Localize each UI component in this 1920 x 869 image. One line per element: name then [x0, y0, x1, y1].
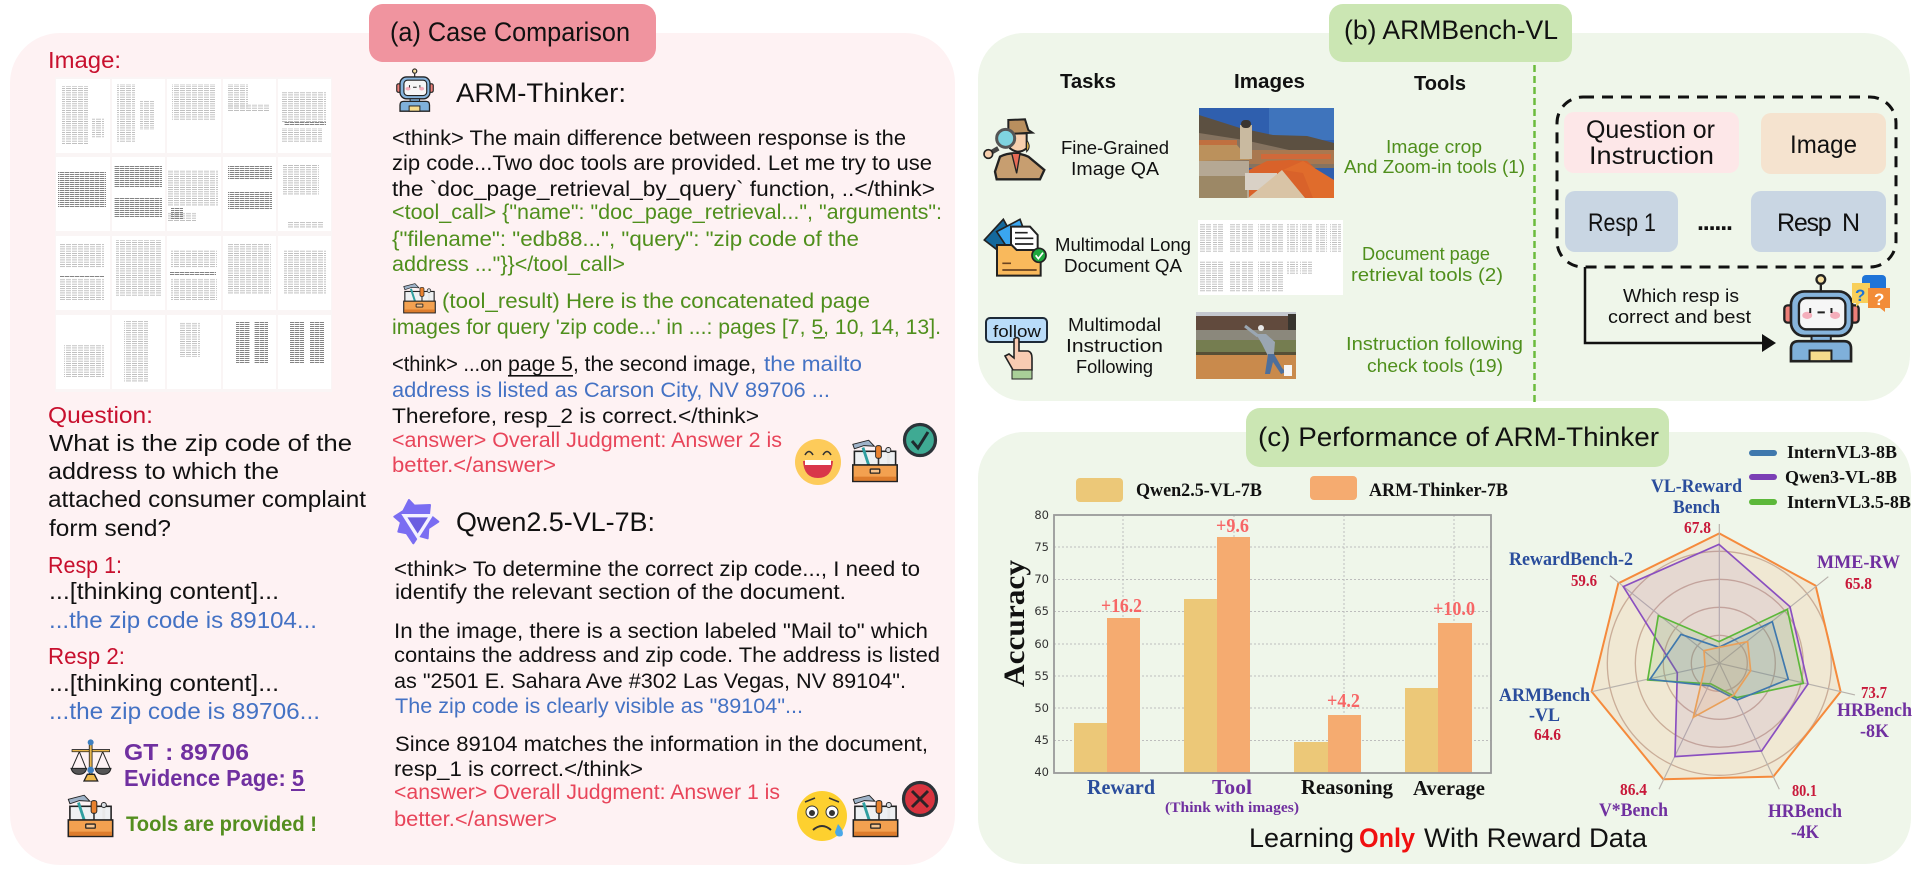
response 2: ...the zip code is 89706... — [49, 698, 320, 724]
reasoning about page 5 — [392, 353, 862, 428]
box: question or instruction: Question or — [1586, 116, 1715, 144]
heading: performance of ARM-Thinker: (c) Performance of ARM-Thinker — [1258, 422, 1659, 452]
box: response N — [1751, 191, 1886, 252]
icon: question bubbles: ? — [1874, 290, 1884, 309]
radar legend — [1752, 442, 1911, 512]
radar legend: Qwen3-VL-8B — [1785, 467, 1897, 487]
box: response 1: Resp 1 — [1588, 209, 1656, 237]
icon: toolbox — [853, 795, 898, 836]
radar axis labels: 59.6 — [1571, 571, 1597, 590]
panel: case comparison — [10, 4, 955, 865]
y axis tick labels: 55 — [1034, 669, 1049, 683]
radar axis labels — [1499, 476, 1912, 843]
arrow caption — [1608, 286, 1751, 327]
radar axis labels: -8K — [1860, 721, 1889, 742]
radar axis labels: RewardBench-2 — [1509, 549, 1633, 570]
correct answer text: better.</answer> — [392, 454, 556, 477]
task: fine-grained image QA: Image QA — [1071, 159, 1159, 179]
category labels: Reasoning — [1301, 775, 1393, 799]
series: InternVL3-8B — [1650, 622, 1788, 700]
improvement labels: +4.2 — [1327, 691, 1360, 712]
caption: learning only with reward data: With Reward Data — [1424, 823, 1648, 853]
icon: balance scales — [71, 739, 111, 781]
category labels: Tool — [1212, 775, 1252, 799]
radar axis labels: HRBench — [1837, 700, 1912, 721]
tool: instruction following check: check tools (19) — [1367, 356, 1503, 376]
series: inner baseline — [1693, 642, 1751, 717]
column heading: tools: Tools — [1414, 73, 1466, 95]
ARM-Thinker thinking text: the `doc_page_retrieval_by_query` function, ..</think> — [392, 178, 935, 201]
radar axis labels: ARMBench — [1499, 685, 1590, 706]
y axis tick labels: 75 — [1034, 540, 1049, 554]
y axis tick labels — [1034, 508, 1049, 779]
tool: document page retrieval: Document page — [1362, 244, 1490, 264]
tool: image crop and zoom: And Zoom-in tools (1) — [1344, 157, 1525, 177]
task: multimodal long document QA: Document QA — [1064, 256, 1182, 276]
question block — [48, 402, 367, 541]
column heading: tasks: Tasks — [1060, 71, 1116, 93]
tool result text: images for query 'zip code...' in ...: pages [7, 5, 10, 14, 13]. — [392, 316, 941, 339]
response 1 — [48, 552, 317, 633]
tool: document page retrieval — [1351, 244, 1503, 285]
reasoning about page 5: address is listed as Carson City, NV 89706 ... — [392, 379, 830, 402]
heading: case comparison: (a) Case Comparison — [390, 17, 630, 47]
tool call text: address ..."}}</tool_call> — [392, 253, 625, 276]
Qwen thinking text: <think> To determine the correct zip code..., I need to — [394, 558, 920, 581]
icon: cross badge — [904, 782, 936, 816]
response 1: ...the zip code is 89104... — [49, 607, 317, 633]
icon: question bubbles — [1852, 275, 1890, 312]
box: response 1 — [1565, 191, 1678, 252]
ellipsis: ...... — [1697, 208, 1733, 236]
tool result text: (tool_result) Here is the concatenated page — [442, 290, 870, 313]
wrong answer text: better.</answer> — [394, 808, 557, 831]
icon: follow button with hand: follow — [993, 322, 1042, 341]
reasoning about page 5: <think> ...on — [392, 353, 508, 376]
document page thumbnails — [55, 77, 332, 392]
question block: Question: — [48, 402, 153, 428]
tool: image crop and zoom — [1344, 137, 1525, 177]
tool result text — [392, 290, 941, 339]
tool call text — [392, 201, 942, 276]
y axis tick labels: 80 — [1034, 508, 1049, 522]
box: question or instruction — [1564, 112, 1739, 173]
caption: learning only with reward data: Learning — [1249, 823, 1354, 853]
Qwen heading: Qwen2.5-VL-7B: — [456, 507, 655, 537]
question block: form send? — [49, 515, 171, 541]
improvement labels: +10.0 — [1433, 599, 1475, 620]
reasoning about page 5: page 5 — [508, 353, 573, 376]
heading: case comparison — [369, 4, 656, 62]
radar axis labels: Bench — [1673, 497, 1720, 518]
response 1: Resp 1: — [48, 552, 122, 578]
task: multimodal instruction following: Following — [1076, 357, 1153, 377]
radar axis labels: 64.6 — [1534, 725, 1561, 744]
Qwen thinking text: contains the address and zip code. The address is listed — [394, 644, 940, 667]
ground truth: Evidence Page: 5 — [124, 765, 304, 791]
radar chart — [1499, 442, 1912, 843]
improvement labels: +16.2 — [1101, 596, 1142, 617]
heading: performance of ARM-Thinker — [1246, 408, 1669, 467]
y axis tick labels: 45 — [1034, 733, 1049, 747]
radar axis labels: V*Bench — [1599, 800, 1668, 821]
task: fine-grained image QA: Fine-Grained — [1061, 138, 1169, 158]
image label: Image: — [48, 47, 121, 73]
tool: image crop and zoom: Image crop — [1386, 137, 1482, 157]
task: multimodal instruction following: Multimodal — [1068, 315, 1161, 335]
radar legend: InternVL3-8B — [1787, 442, 1897, 462]
Qwen thinking text: Since 89104 matches the information in the document, — [395, 733, 928, 756]
icon: robot — [397, 69, 433, 111]
bar chart legend: ARM-Thinker-7B — [1369, 481, 1508, 501]
y axis tick labels: 40 — [1034, 765, 1049, 779]
task: fine-grained image QA — [1061, 138, 1169, 179]
tools provided note: Tools are provided ! — [126, 813, 317, 836]
radar axis labels: 65.8 — [1845, 574, 1872, 593]
icon: Qwen logo — [394, 500, 438, 543]
box: image — [1761, 113, 1886, 174]
category labels: Average — [1413, 776, 1485, 800]
ARM-Thinker thinking text — [392, 127, 935, 201]
column heading: images: Images — [1234, 71, 1305, 93]
reasoning about page 5: , the second image, — [573, 353, 762, 376]
radar axis labels: MME-RW — [1817, 552, 1900, 573]
bar chart: accuracy — [998, 508, 1491, 816]
caption: learning only with reward data: Only — [1359, 823, 1415, 853]
icon: laughing face — [795, 439, 841, 485]
icon: follow button with hand — [986, 318, 1047, 379]
question block: address to which the — [48, 458, 279, 484]
tool call text: <tool_call> {"name": "doc_page_retrieval...", "arguments": — [392, 201, 942, 224]
category labels: Reward — [1087, 775, 1155, 799]
y axis tick labels: 50 — [1034, 701, 1049, 715]
icon: check badge — [904, 424, 936, 456]
tool: instruction following check: Instruction following — [1346, 334, 1523, 354]
caption: learning only with reward data — [1249, 823, 1648, 853]
improvement labels — [1101, 516, 1475, 712]
category labels: (Think with images) — [1165, 800, 1299, 816]
box: question or instruction: Instruction — [1589, 142, 1714, 170]
Qwen thinking text — [394, 558, 940, 781]
green dashed divider — [1533, 65, 1536, 402]
bars: Reward — [1074, 618, 1140, 773]
radar axis labels: 73.7 — [1861, 683, 1887, 702]
y axis tick labels: 65 — [1034, 604, 1049, 618]
task: multimodal instruction following — [1066, 315, 1163, 377]
panel: performance — [978, 408, 1912, 864]
bars: Tool — [1184, 537, 1250, 773]
arrow to robot — [1585, 267, 1776, 352]
box: response N: Resp N — [1777, 209, 1860, 237]
y axis tick labels: 60 — [1034, 637, 1049, 651]
icon: toolbox — [404, 284, 435, 313]
series: Qwen3-VL-8B — [1623, 544, 1808, 757]
correct answer text: <answer> Overall Judgment: Answer 2 is — [392, 429, 782, 452]
radar axis labels: VL-Reward — [1651, 476, 1742, 497]
Qwen thinking text: resp_1 is correct.</think> — [394, 758, 643, 781]
icon: toolbox — [68, 795, 113, 836]
wrong answer text — [394, 781, 780, 831]
input group: question, image, responses — [1557, 97, 1896, 267]
ground truth: GT : 89706 — [124, 739, 249, 765]
ARM-Thinker thinking text: zip code...Two doc tools are provided. Let me try to use — [392, 152, 932, 175]
arrow caption: correct and best — [1608, 307, 1751, 327]
radar axis labels: 67.8 — [1684, 518, 1711, 537]
tool: document page retrieval: retrieval tools (2) — [1351, 265, 1503, 285]
arrow caption: Which resp is — [1623, 286, 1739, 306]
radar axis labels: HRBench — [1768, 801, 1842, 822]
radar axis labels: 86.4 — [1620, 780, 1647, 799]
y axis tick labels: 70 — [1034, 572, 1049, 586]
icon: detective — [984, 119, 1044, 179]
photo: old town rooftops — [1199, 108, 1334, 198]
response 2: ...[thinking content]... — [49, 670, 279, 696]
heading: ARMBench-VL: (b) ARMBench-VL — [1344, 15, 1558, 45]
image: long document pages — [1198, 220, 1343, 295]
icon: document folder — [984, 219, 1046, 276]
Qwen thinking text: The zip code is clearly visible as "89104"... — [395, 695, 803, 718]
heading: ARMBench-VL — [1329, 4, 1572, 62]
y axis title: Accuracy — [998, 560, 1031, 687]
tool: instruction following check — [1346, 334, 1523, 376]
radar legend: InternVL3.5-8B — [1787, 492, 1911, 512]
photo: man throwing on a field — [1196, 312, 1296, 379]
bar chart legend — [1076, 476, 1508, 502]
Qwen thinking text: as "2501 E. Sahara Ave #302 Las Vegas, NV 89104". — [394, 670, 906, 693]
icon: question bubbles: ? — [1855, 286, 1865, 305]
series: InternVL3.5-8B — [1648, 609, 1803, 698]
panel: ARMBench-VL — [978, 4, 1910, 402]
tool call text: {"filename": "edb88...", "query": "zip code of the — [392, 228, 859, 251]
task: multimodal long document QA — [1055, 235, 1191, 276]
radar axis labels: -VL — [1529, 705, 1560, 726]
radar axis labels: -4K — [1791, 822, 1819, 843]
reasoning about page 5: the mailto — [764, 353, 862, 376]
question block: attached consumer complaint — [48, 486, 367, 512]
ground truth — [124, 739, 305, 791]
task: multimodal long document QA: Multimodal Long — [1055, 235, 1191, 255]
response 2: Resp 2: — [48, 643, 125, 669]
improvement labels: +9.6 — [1216, 516, 1249, 537]
reasoning about page 5: Therefore, resp_2 is correct.</think> — [392, 405, 759, 428]
question block: What is the zip code of the — [49, 430, 352, 456]
box: image: Image — [1790, 131, 1857, 159]
task: multimodal instruction following: Instruction — [1066, 336, 1163, 356]
wrong answer text: <answer> Overall Judgment: Answer 1 is — [394, 781, 780, 804]
correct answer text — [392, 429, 782, 477]
response 1: ...[thinking content]... — [49, 578, 279, 604]
bar chart legend: Qwen2.5-VL-7B — [1136, 481, 1262, 501]
bars: Average — [1405, 623, 1472, 773]
icon: robot judge — [1784, 275, 1859, 361]
response 2 — [48, 643, 320, 724]
Qwen thinking text: In the image, there is a section labeled "Mail to" which — [394, 620, 928, 643]
Qwen thinking text: identify the relevant section of the document. — [395, 581, 846, 604]
icon: toolbox — [853, 440, 897, 481]
ARM-Thinker heading: ARM-Thinker: — [456, 78, 626, 108]
icon: crying face — [797, 791, 847, 841]
bars: Reasoning — [1294, 715, 1361, 773]
series: ARM-Thinker — [1592, 533, 1841, 779]
category labels — [1087, 775, 1485, 816]
ARM-Thinker thinking text: <think> The main difference between response is the — [392, 127, 906, 150]
radar axis labels: 80.1 — [1792, 781, 1817, 800]
